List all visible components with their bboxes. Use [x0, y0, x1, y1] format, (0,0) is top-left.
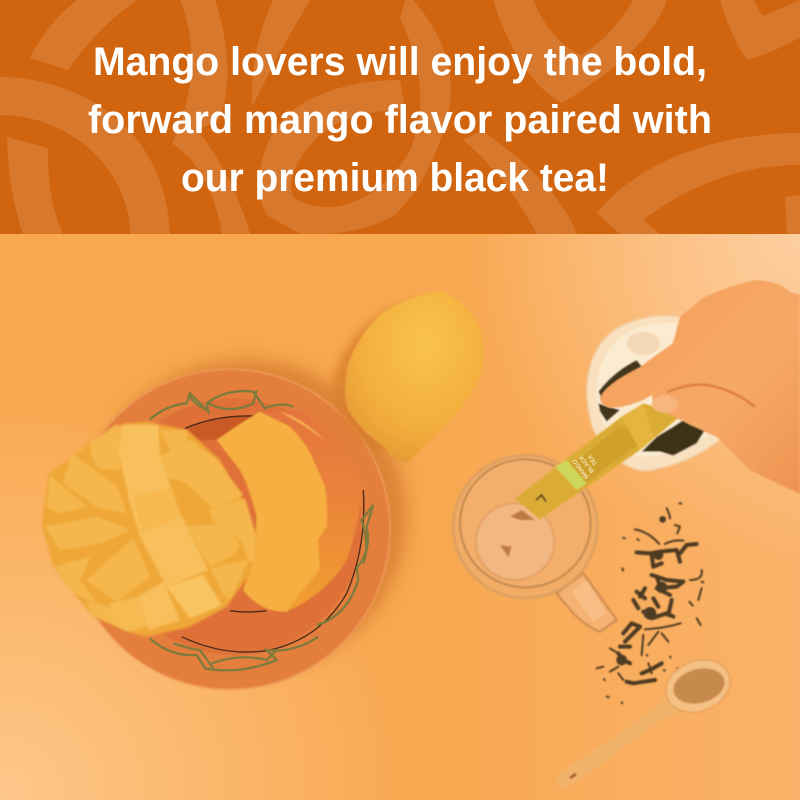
- sachet printed text: TEA: [587, 452, 599, 466]
- plate shadow: [87, 360, 407, 673]
- mango slice flesh: [217, 412, 327, 612]
- mango slice skin: [217, 410, 361, 612]
- sachet body: [515, 403, 682, 519]
- sachet chevron mark: [536, 495, 546, 502]
- mug body: [453, 455, 597, 598]
- mug base: [476, 503, 554, 580]
- photo background: orange tabletop: [0, 234, 800, 800]
- photo: tea stick sachet: [515, 403, 682, 519]
- photo: glass mug: [453, 455, 617, 632]
- headline: Mango lovers will enjoy the bold,: [93, 40, 707, 84]
- spoon handle end mark: [570, 774, 576, 778]
- sachet green band: [555, 460, 587, 490]
- headline: forward mango flavor paired with: [88, 98, 712, 142]
- sachet printed text: BLACK: [578, 453, 596, 474]
- photo: whole mango: [333, 291, 484, 463]
- photo: white bowl of tea leaves: [587, 316, 740, 471]
- header banner: [0, 0, 800, 234]
- sachet printed text: MANGO: [572, 457, 591, 480]
- spoon handle: [556, 688, 692, 788]
- photo: hand holding sachet: [600, 280, 800, 494]
- sachet printed text: [572, 452, 599, 480]
- spoon bowl: [658, 650, 738, 722]
- mango centre strip: [118, 425, 208, 587]
- photo: loose tea leaves: [597, 503, 703, 703]
- mug handle: [557, 573, 617, 632]
- headline: [88, 40, 712, 200]
- plate well: [105, 398, 362, 655]
- headline: our premium black tea!: [181, 156, 609, 200]
- thumb crease: [667, 385, 755, 407]
- photo: wooden spoon with powder: [556, 650, 738, 788]
- tea leaves in bowl: [598, 360, 643, 402]
- photo: plate with cut mango: [42, 360, 407, 689]
- scored mango half: [42, 422, 257, 637]
- mango shadow: [333, 300, 420, 450]
- tea powder residue: [500, 510, 535, 557]
- mango cubes: [167, 575, 222, 618]
- spoon powder: [670, 663, 728, 709]
- mango body: [345, 291, 484, 463]
- thumbnail: [652, 395, 678, 413]
- plate green vine pattern: [150, 390, 373, 670]
- bowl: [587, 316, 740, 471]
- hand and fingers: [600, 280, 800, 494]
- plate rim: [70, 369, 390, 689]
- plate black ring: [182, 416, 364, 652]
